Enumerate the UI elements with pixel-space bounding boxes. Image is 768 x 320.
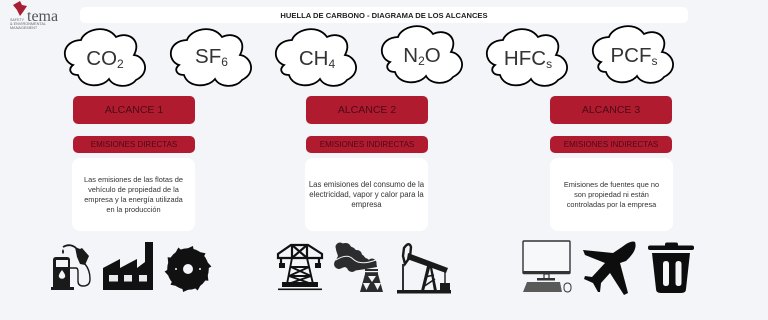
cloud: PCFs: PCF <box>610 44 652 67</box>
icon: saw blade <box>165 246 211 292</box>
cloud: PCFs <box>593 26 673 83</box>
cloud: N2O <box>382 26 462 83</box>
panel: alcance 1 header <box>73 96 195 124</box>
panel: alcance 3 header <box>550 96 672 124</box>
text block: alcance 3: Emisiones de fuentes que no son propiedad ni están controladas por la empresa <box>564 180 659 209</box>
logo: tema <box>27 8 58 25</box>
cloud: HFCs <box>487 29 567 86</box>
icon: oil pump jack <box>397 244 451 294</box>
panel: alcance 2 header: ALCANCE 2 <box>338 104 396 116</box>
title: HUELLA DE CARBONO - DIAGRAMA DE LOS ALCANCES <box>280 10 488 20</box>
icon: airplane <box>583 242 636 295</box>
panel: emisiones directas: EMISIONES DIRECTAS <box>91 140 177 149</box>
text block: alcance 2: empresa <box>351 200 382 209</box>
cloud: CH4: CH <box>299 47 328 70</box>
cloud: N2O: 2 <box>418 54 425 68</box>
cloud: CO2: CO <box>86 47 117 70</box>
icon: trash can <box>648 242 694 293</box>
icon: factory <box>103 242 153 290</box>
cloud: N2O: N <box>403 44 418 67</box>
icon: fuel pump <box>51 245 90 290</box>
cloud: HFCs: HFC <box>504 47 546 70</box>
text block: alcance 1 <box>72 158 195 231</box>
panel: emisiones directas <box>73 136 195 153</box>
panel: emisiones indirectas 3: EMISIONES INDIRECTAS <box>564 140 658 149</box>
text block: alcance 2: Las emisiones del consumo de la <box>309 180 424 189</box>
cloud: CO2: 2 <box>117 57 124 71</box>
text block: alcance 3 <box>550 158 673 231</box>
cloud: N2O: O <box>425 44 441 67</box>
cloud: HFCs: s <box>546 57 552 71</box>
title <box>80 7 688 23</box>
cloud: CH4 <box>276 29 356 86</box>
cloud: SF6: 6 <box>221 55 228 69</box>
logo: & ENVIRONMENTAL <box>10 22 46 26</box>
cloud: CO2 <box>65 29 145 86</box>
panel: emisiones indirectas 3 <box>550 136 672 153</box>
panel: alcance 1 header: ALCANCE 1 <box>105 104 163 116</box>
logo: SAFETY <box>10 18 25 22</box>
panel: alcance 2 header <box>306 96 428 124</box>
cloud: SF6: SF <box>195 45 221 68</box>
logo: MANAGEMENT <box>10 26 38 30</box>
panel: alcance 3 header: ALCANCE 3 <box>582 104 640 116</box>
panel: emisiones indirectas 2: EMISIONES INDIRECTAS <box>320 140 414 149</box>
text block: alcance 1: Las emisiones de las flotas de vehículo de propiedad de la empresa y la energía utilizada en la producción <box>84 174 183 214</box>
panel: emisiones indirectas 2 <box>306 136 428 153</box>
text block: alcance 2: electricidad, vapor y calor para la <box>309 190 424 199</box>
cloud: CH4: 4 <box>328 57 335 71</box>
text block: alcance 2 <box>305 158 428 231</box>
icon: nuclear plant with smoke <box>334 242 383 292</box>
cloud: PCFs: s <box>652 54 658 68</box>
cloud: SF6 <box>171 29 251 86</box>
icon: electricity pylon <box>278 245 322 290</box>
icon: desktop computer <box>523 241 571 292</box>
